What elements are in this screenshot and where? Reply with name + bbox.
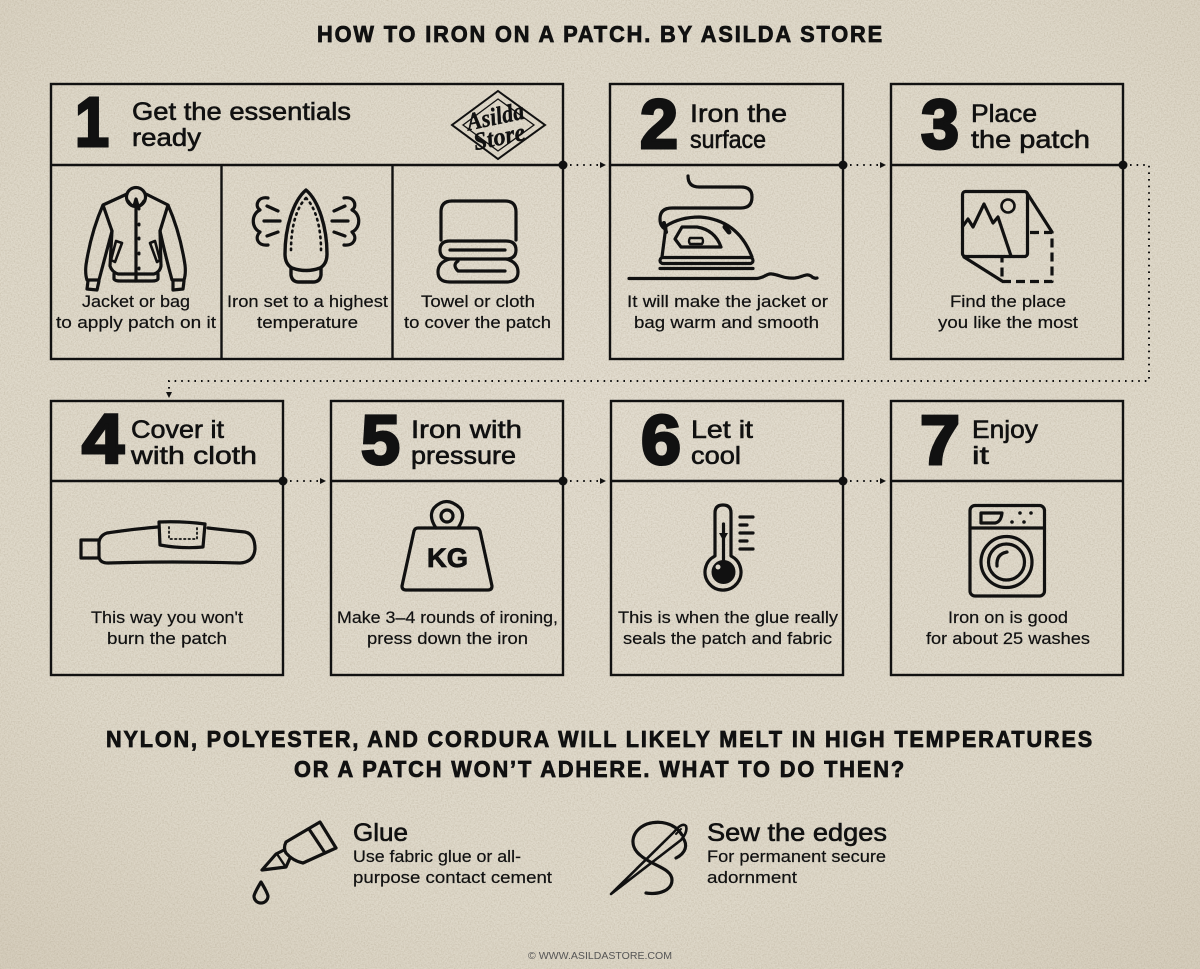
heading: get the essentials ready [132,98,351,152]
heading: place the patch: Place [971,100,1037,128]
panel: step 2 iron the surface [610,84,843,359]
arrow: step 1 to step 2 [558,160,606,170]
heading: iron the surface: Iron the [690,100,787,128]
label: step 2: It will make the jacket or [627,293,829,311]
icon: kg weight [402,502,492,590]
label: step 3: Find the place [950,293,1066,311]
heading: iron the surface: surface [690,126,766,154]
label: step 3: you like the most [938,314,1078,332]
icon: thermometer [705,505,753,590]
panel: step 7 enjoy it [891,401,1123,675]
label: step 6: seals the patch and fabric [623,630,832,648]
number 6: 6 [641,401,681,479]
heading: cover it with cloth [130,416,257,470]
label: step 5: press down the iron [367,630,528,648]
label: step 7: for about 25 washes [926,630,1090,648]
alternative: sew the edges [611,819,887,894]
heading: iron with pressure: pressure [411,442,516,470]
heading: iron the surface [690,100,787,154]
heading: cover it with cloth: Cover it [131,416,224,444]
text: glue: Use fabric glue or all- [353,848,521,866]
arrow: step 6 to step 7 [838,476,886,486]
label: step 7: Iron on is good [948,609,1068,627]
heading: get the essentials ready: Get the essentials [132,98,351,126]
icon: folded towel [438,201,518,282]
label: towel: to cover the patch [404,314,551,332]
label: iron [227,293,388,332]
number 3: 3 [921,85,959,163]
heading: let it cool: cool [691,442,741,470]
number 7: 7 [920,401,960,479]
heading: iron with pressure [411,416,522,470]
warning heading: OR A PATCH WON’T ADHERE. WHAT TO DO THEN? [294,756,906,782]
footer credit: © WWW.ASILDASTORE.COM [528,951,672,962]
icon: glue tube and drop [254,822,336,903]
icon: jacket [86,188,185,290]
label: step 6 [618,609,839,648]
icon: iron on surface [629,176,817,278]
icon: needle and thread [611,822,686,894]
heading: let it cool [691,416,753,470]
heading: let it cool: Let it [691,416,753,444]
heading: iron with pressure: Iron with [411,416,522,444]
panel: step 4 cover with cloth [51,400,283,675]
arrow: step 3 to step 4 [166,160,1149,398]
label: step 2 [627,293,829,332]
heading: enjoy it: it [972,442,989,470]
label: step 2: bag warm and smooth [634,314,819,332]
text: glue: Glue [353,819,408,847]
text: sew the edges: Sew the edges [707,819,887,847]
label: step 7 [926,609,1090,648]
number 4: 4 [82,400,124,478]
panel: step 5 iron with pressure [331,401,563,675]
text: sew the edges: adornment [707,869,797,887]
heading: get the essentials ready: ready [132,124,202,152]
label: towel: Towel or cloth [421,293,535,311]
number 2: 2 [640,85,678,163]
label: step 4: burn the patch [107,630,227,648]
label: iron: Iron set to a highest [227,293,388,311]
label: jacket: Jacket or bag [82,293,190,311]
icon: iron with steam [253,190,359,282]
title: HOW TO IRON ON A PATCH. BY ASILDA STORE [317,21,884,47]
icon: patch placement [962,192,1052,282]
icon: washing machine [970,506,1044,596]
heading: place the patch: the patch [971,126,1090,154]
label: jacket: to apply patch on it [56,314,216,332]
icon: cloth over patch [81,522,255,563]
text: glue [353,819,552,887]
heading: place the patch [971,100,1090,154]
panel: step 1 essentials [51,83,563,359]
label: step 5 [337,609,558,648]
label: step 3 [938,293,1078,332]
logo: Asilda Store [452,91,545,159]
logo: Asilda Store: Asilda [463,98,527,137]
warning heading [106,726,1094,782]
label: step 4: This way you won't [91,609,243,627]
heading: enjoy it [972,416,1039,470]
label: towel [404,293,551,332]
alternative: glue [254,819,552,903]
text: sew the edges [707,819,887,887]
number 5: 5 [361,401,400,479]
text: glue: purpose contact cement [353,869,552,887]
arrow: step 4 to step 5 [278,476,326,486]
panel: step 3 place the patch [891,84,1123,359]
arrow: step 2 to step 3 [838,160,886,170]
heading: enjoy it: Enjoy [972,416,1039,444]
logo: Asilda Store: Store [471,119,528,156]
number 1: 1 [75,83,109,161]
label: step 4 [91,609,243,648]
label: step 6: This is when the glue really [618,609,839,627]
arrow: step 5 to step 6 [558,476,606,486]
label: iron: temperature [257,314,358,332]
label: jacket [56,293,216,332]
icon: kg weight: KG [427,543,468,573]
text: sew the edges: For permanent secure [707,848,886,866]
heading: cover it with cloth: with cloth [130,442,257,470]
warning heading: NYLON, POLYESTER, AND CORDURA WILL LIKELY MELT IN HIGH TEMPERATURES [106,726,1094,752]
label: step 5: Make 3–4 rounds of ironing, [337,609,558,627]
panel: step 6 let it cool [611,401,843,675]
